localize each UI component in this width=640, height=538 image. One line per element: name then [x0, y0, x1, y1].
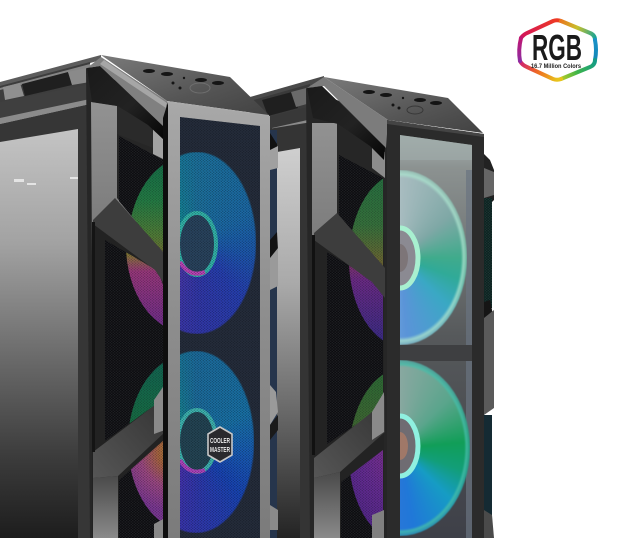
right case rear top band [250, 76, 324, 538]
badge title: RGB [532, 27, 582, 68]
left case front frame [168, 103, 270, 538]
right case front fan 2 [400, 345, 472, 536]
Cooler Master logo badge: COOLER [210, 436, 230, 445]
badge outline [519, 20, 596, 80]
product photo: right PC case [250, 76, 494, 538]
left case rear top band [0, 55, 101, 538]
right case dark middle frame [314, 235, 384, 538]
left case outer side details [270, 130, 278, 538]
Cooler Master logo badge [208, 427, 232, 462]
Cooler Master logo badge: MASTER [210, 445, 230, 454]
right case black glossy wedge [307, 86, 385, 160]
left case front fan 1 [180, 152, 256, 334]
left case side pillar [91, 102, 162, 256]
RGB 16.7 Million Colors badge [519, 20, 596, 80]
right case front fan 1 [400, 136, 472, 538]
black separator [163, 102, 168, 538]
mesh texture overlay [180, 117, 260, 538]
product photo: left PC case [0, 55, 278, 538]
left case front mesh [180, 117, 260, 538]
right case front frame [387, 120, 484, 538]
left case front fan 2 [180, 351, 254, 533]
right case top panel [307, 77, 483, 160]
left case top panel [87, 55, 269, 140]
left case side glass [0, 129, 78, 538]
right case side pillar [312, 123, 360, 268]
left side mesh windows with fans [105, 136, 163, 538]
badge caption: 16.7 Million Colors [531, 64, 582, 70]
right case body base [306, 88, 388, 538]
right side mesh windows with fans [327, 155, 383, 538]
left case glass reflections [14, 177, 78, 185]
right case diagonal bands [312, 145, 385, 538]
left case dark middle frame [92, 222, 164, 538]
left case black glossy wedge [87, 66, 165, 140]
left case diagonal bands [92, 106, 165, 538]
right case side glass [277, 148, 300, 538]
left case body base [86, 68, 167, 538]
right case outer side details [484, 154, 494, 538]
